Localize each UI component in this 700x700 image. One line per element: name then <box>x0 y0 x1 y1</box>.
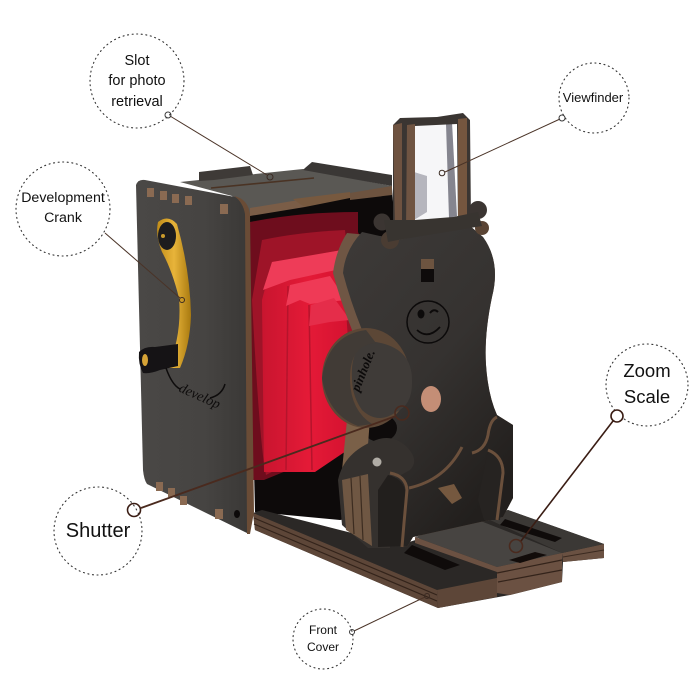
callout: shutter: Shutter <box>66 520 131 542</box>
callout: zoom scale <box>510 344 688 552</box>
callout: slot for photo retrieval: retrieval <box>111 94 163 110</box>
callout: development crank: Development <box>21 190 105 206</box>
camera side panel <box>136 180 254 534</box>
shutter arm <box>338 438 414 548</box>
smiley face engraving <box>407 301 449 343</box>
camera interior shadow <box>248 188 400 520</box>
screw hole <box>234 510 240 518</box>
rear edge <box>303 162 392 186</box>
callout: slot for photo retrieval: for photo <box>108 73 166 89</box>
tab <box>438 484 462 504</box>
callout: viewfinder <box>439 63 629 176</box>
crank handle <box>139 344 178 373</box>
front panel <box>322 201 513 548</box>
callout: slot for photo retrieval <box>90 34 273 180</box>
callout: slot for photo retrieval: Slot <box>124 53 150 69</box>
wood strips under wheel <box>342 418 370 470</box>
dark hole behind shutter <box>363 414 397 442</box>
callout: zoom scale: Scale <box>624 386 670 407</box>
small square notch <box>421 259 434 269</box>
finger joints <box>147 188 228 519</box>
pinhole lens opening <box>421 386 441 412</box>
callout: front cover <box>293 594 430 669</box>
crank pivot <box>158 222 176 250</box>
engraved develop label: develop <box>176 381 222 413</box>
foot guide left <box>378 475 405 547</box>
engraved develop label <box>166 368 225 413</box>
callout: front cover: Front <box>309 623 338 637</box>
top panel with photo retrieval slot <box>180 162 392 216</box>
callout: zoom scale: Zoom <box>623 360 671 381</box>
front panel ear pieces <box>374 214 390 230</box>
shutter wheel <box>322 328 412 428</box>
rear tab <box>199 166 253 181</box>
sliding zoom scale plate <box>404 518 562 595</box>
callout: front cover: Cover <box>307 640 339 654</box>
illustration: camera <box>136 113 604 608</box>
callout: development crank <box>16 162 184 302</box>
arc slot <box>409 447 462 488</box>
bellows: middle fold <box>252 230 354 475</box>
callout: development crank: Crank <box>44 210 83 226</box>
callout: shutter <box>54 406 409 575</box>
callout: viewfinder: Viewfinder <box>563 90 624 105</box>
development crank <box>139 218 191 373</box>
foot guide right <box>478 450 503 520</box>
shutter wheel: pinhole. <box>347 347 378 394</box>
base plate with front cover <box>253 510 604 608</box>
bellows: front red folds <box>262 250 355 472</box>
viewfinder frame <box>393 113 471 236</box>
bellows: dark back fold <box>250 212 370 480</box>
